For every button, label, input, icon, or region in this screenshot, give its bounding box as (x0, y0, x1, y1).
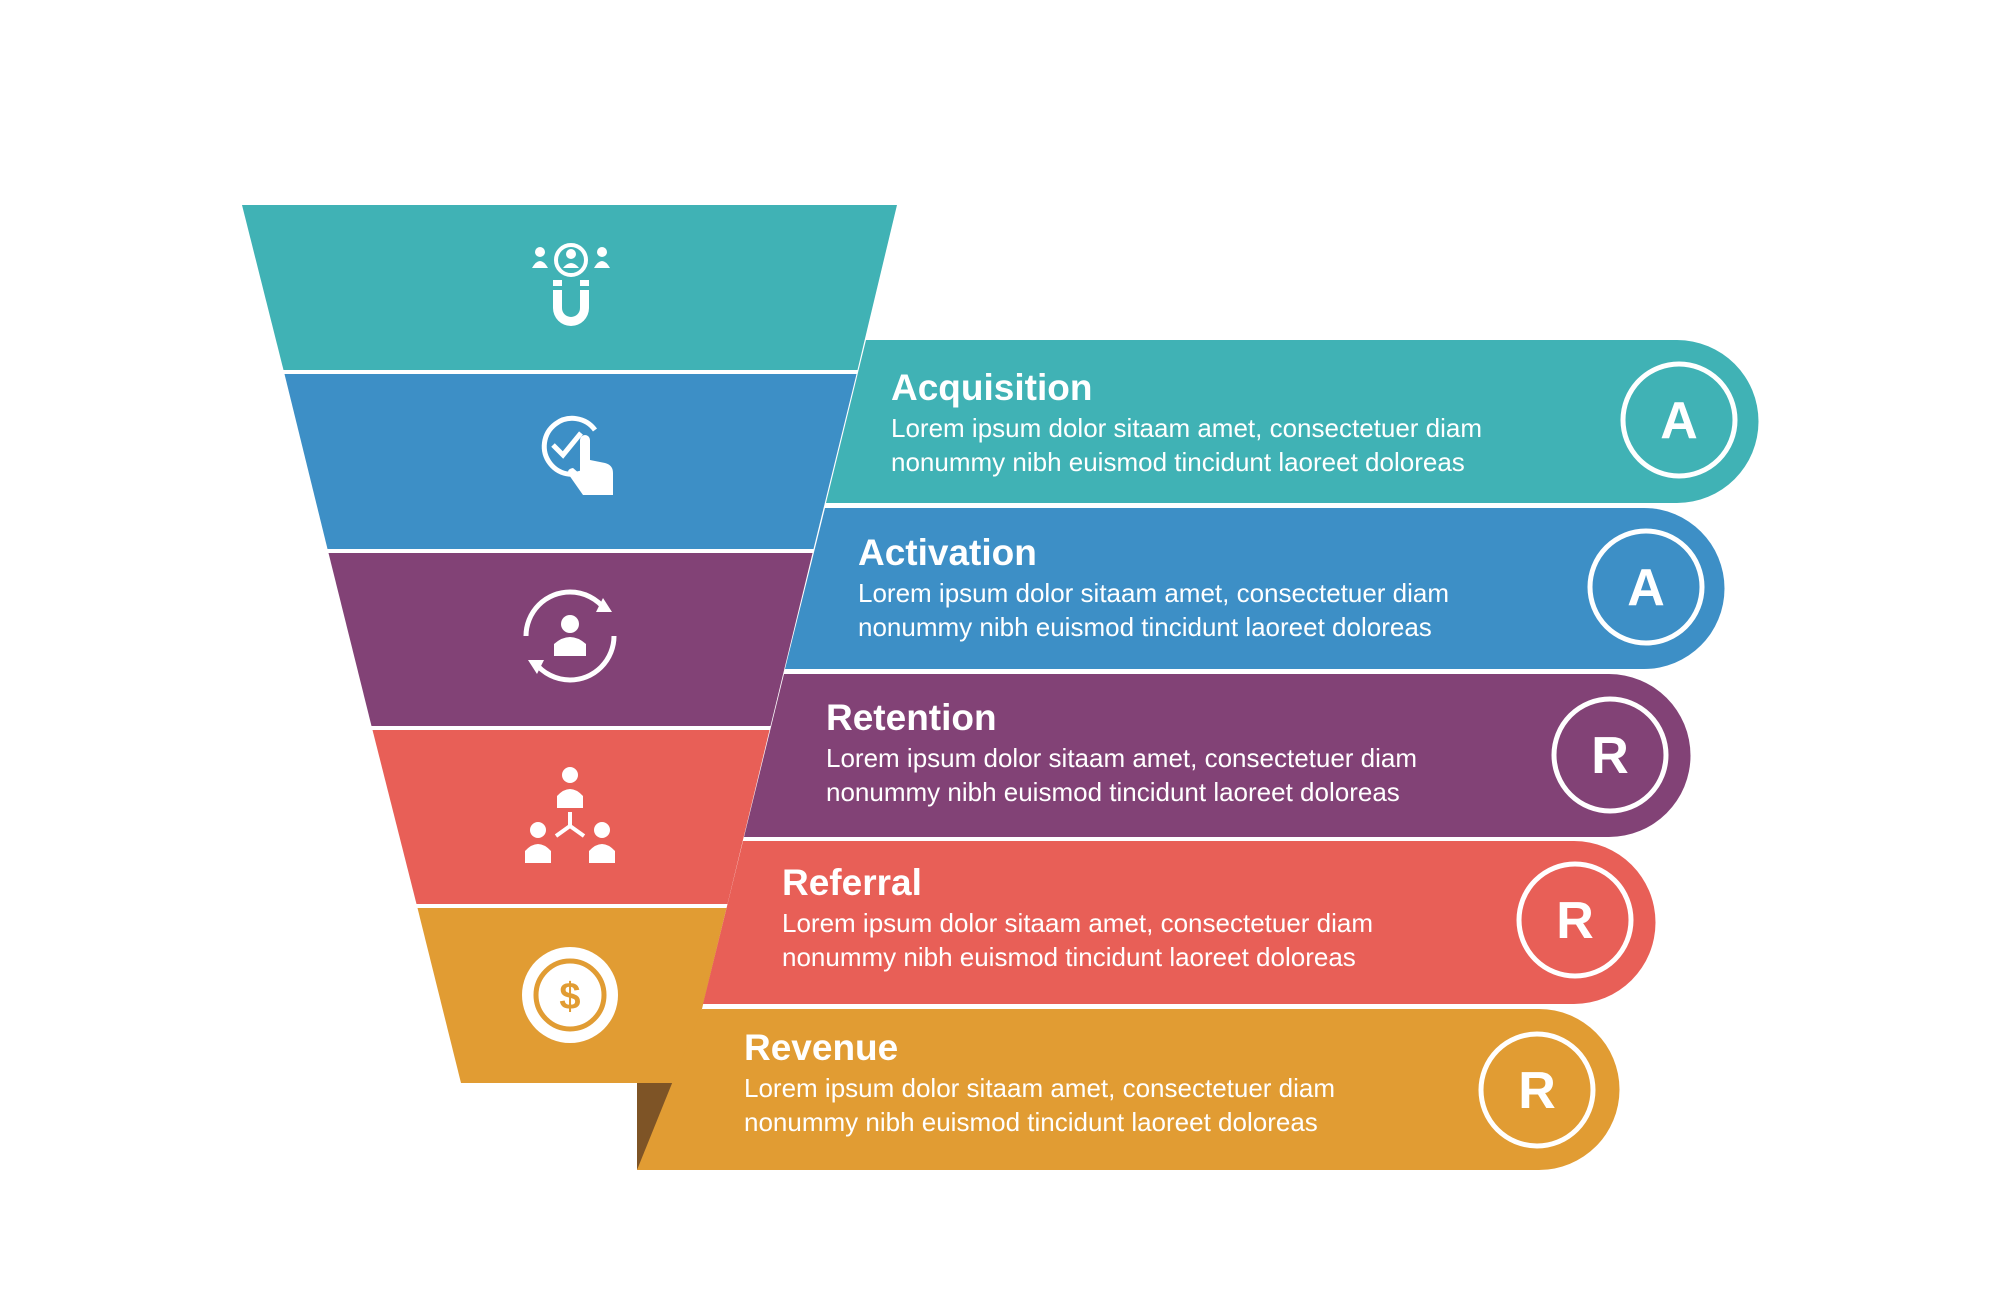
title: Referral: Referral (782, 862, 922, 903)
funnel segment: referral (372, 728, 770, 906)
icon: referral people (525, 767, 615, 863)
funnel segment: retention (328, 551, 813, 728)
circle badge A: A (1660, 392, 1698, 450)
text: referral body: Lorem ipsum dolor sitaam amet, consectetuer diam (782, 908, 1373, 938)
circle badge A (1590, 531, 1702, 643)
circle badge R (1519, 864, 1631, 976)
circle badge R: R (1591, 727, 1629, 785)
text: acquisition body: Lorem ipsum dolor sitaam amet, consectetuer diam (891, 413, 1482, 443)
title: Acquisition: Acquisition (891, 367, 1092, 408)
title: Retention: Retention (826, 697, 997, 738)
bar: acquisition (826, 340, 1758, 503)
circle badge A (1623, 364, 1735, 476)
fold (637, 1083, 684, 1170)
bar: referral (703, 841, 1656, 1004)
circle badge A: A (1627, 559, 1665, 617)
funnel segment: acquisition (242, 205, 897, 372)
title: Revenue: Revenue (744, 1027, 898, 1068)
circle badge R (1481, 1034, 1593, 1146)
text: activation body: nonummy nibh euismod tincidunt laoreet doloreas (858, 612, 1432, 642)
funnel (242, 205, 897, 1083)
icon: retention cycle person (526, 592, 614, 680)
text: revenue body: nonummy nibh euismod tincidunt laoreet doloreas (744, 1107, 1318, 1137)
icon: check hand (544, 418, 613, 495)
funnel segment: activation (284, 372, 857, 551)
text: retention body: Lorem ipsum dolor sitaam amet, consectetuer diam (826, 743, 1417, 773)
circle badge R: R (1518, 1062, 1556, 1120)
circle badge R: R (1556, 892, 1594, 950)
bar: revenue (637, 1009, 1620, 1170)
funnel segment: revenue (417, 906, 727, 1083)
text: activation body: Lorem ipsum dolor sitaam amet, consectetuer diam (858, 578, 1449, 608)
bar: retention (744, 674, 1690, 837)
text: revenue body: Lorem ipsum dolor sitaam amet, consectetuer diam (744, 1073, 1335, 1103)
title: Activation: Activation (858, 532, 1037, 573)
icon: magnet with people (532, 245, 610, 326)
icon: dollar coin (522, 947, 618, 1043)
text: retention body: nonummy nibh euismod tincidunt laoreet doloreas (826, 777, 1400, 807)
icon: dollar coin: $ (559, 976, 581, 1018)
text: referral body: nonummy nibh euismod tincidunt laoreet doloreas (782, 942, 1356, 972)
text: acquisition body: nonummy nibh euismod tincidunt laoreet doloreas (891, 447, 1465, 477)
circle badge R (1554, 699, 1666, 811)
bar: activation (785, 508, 1725, 669)
